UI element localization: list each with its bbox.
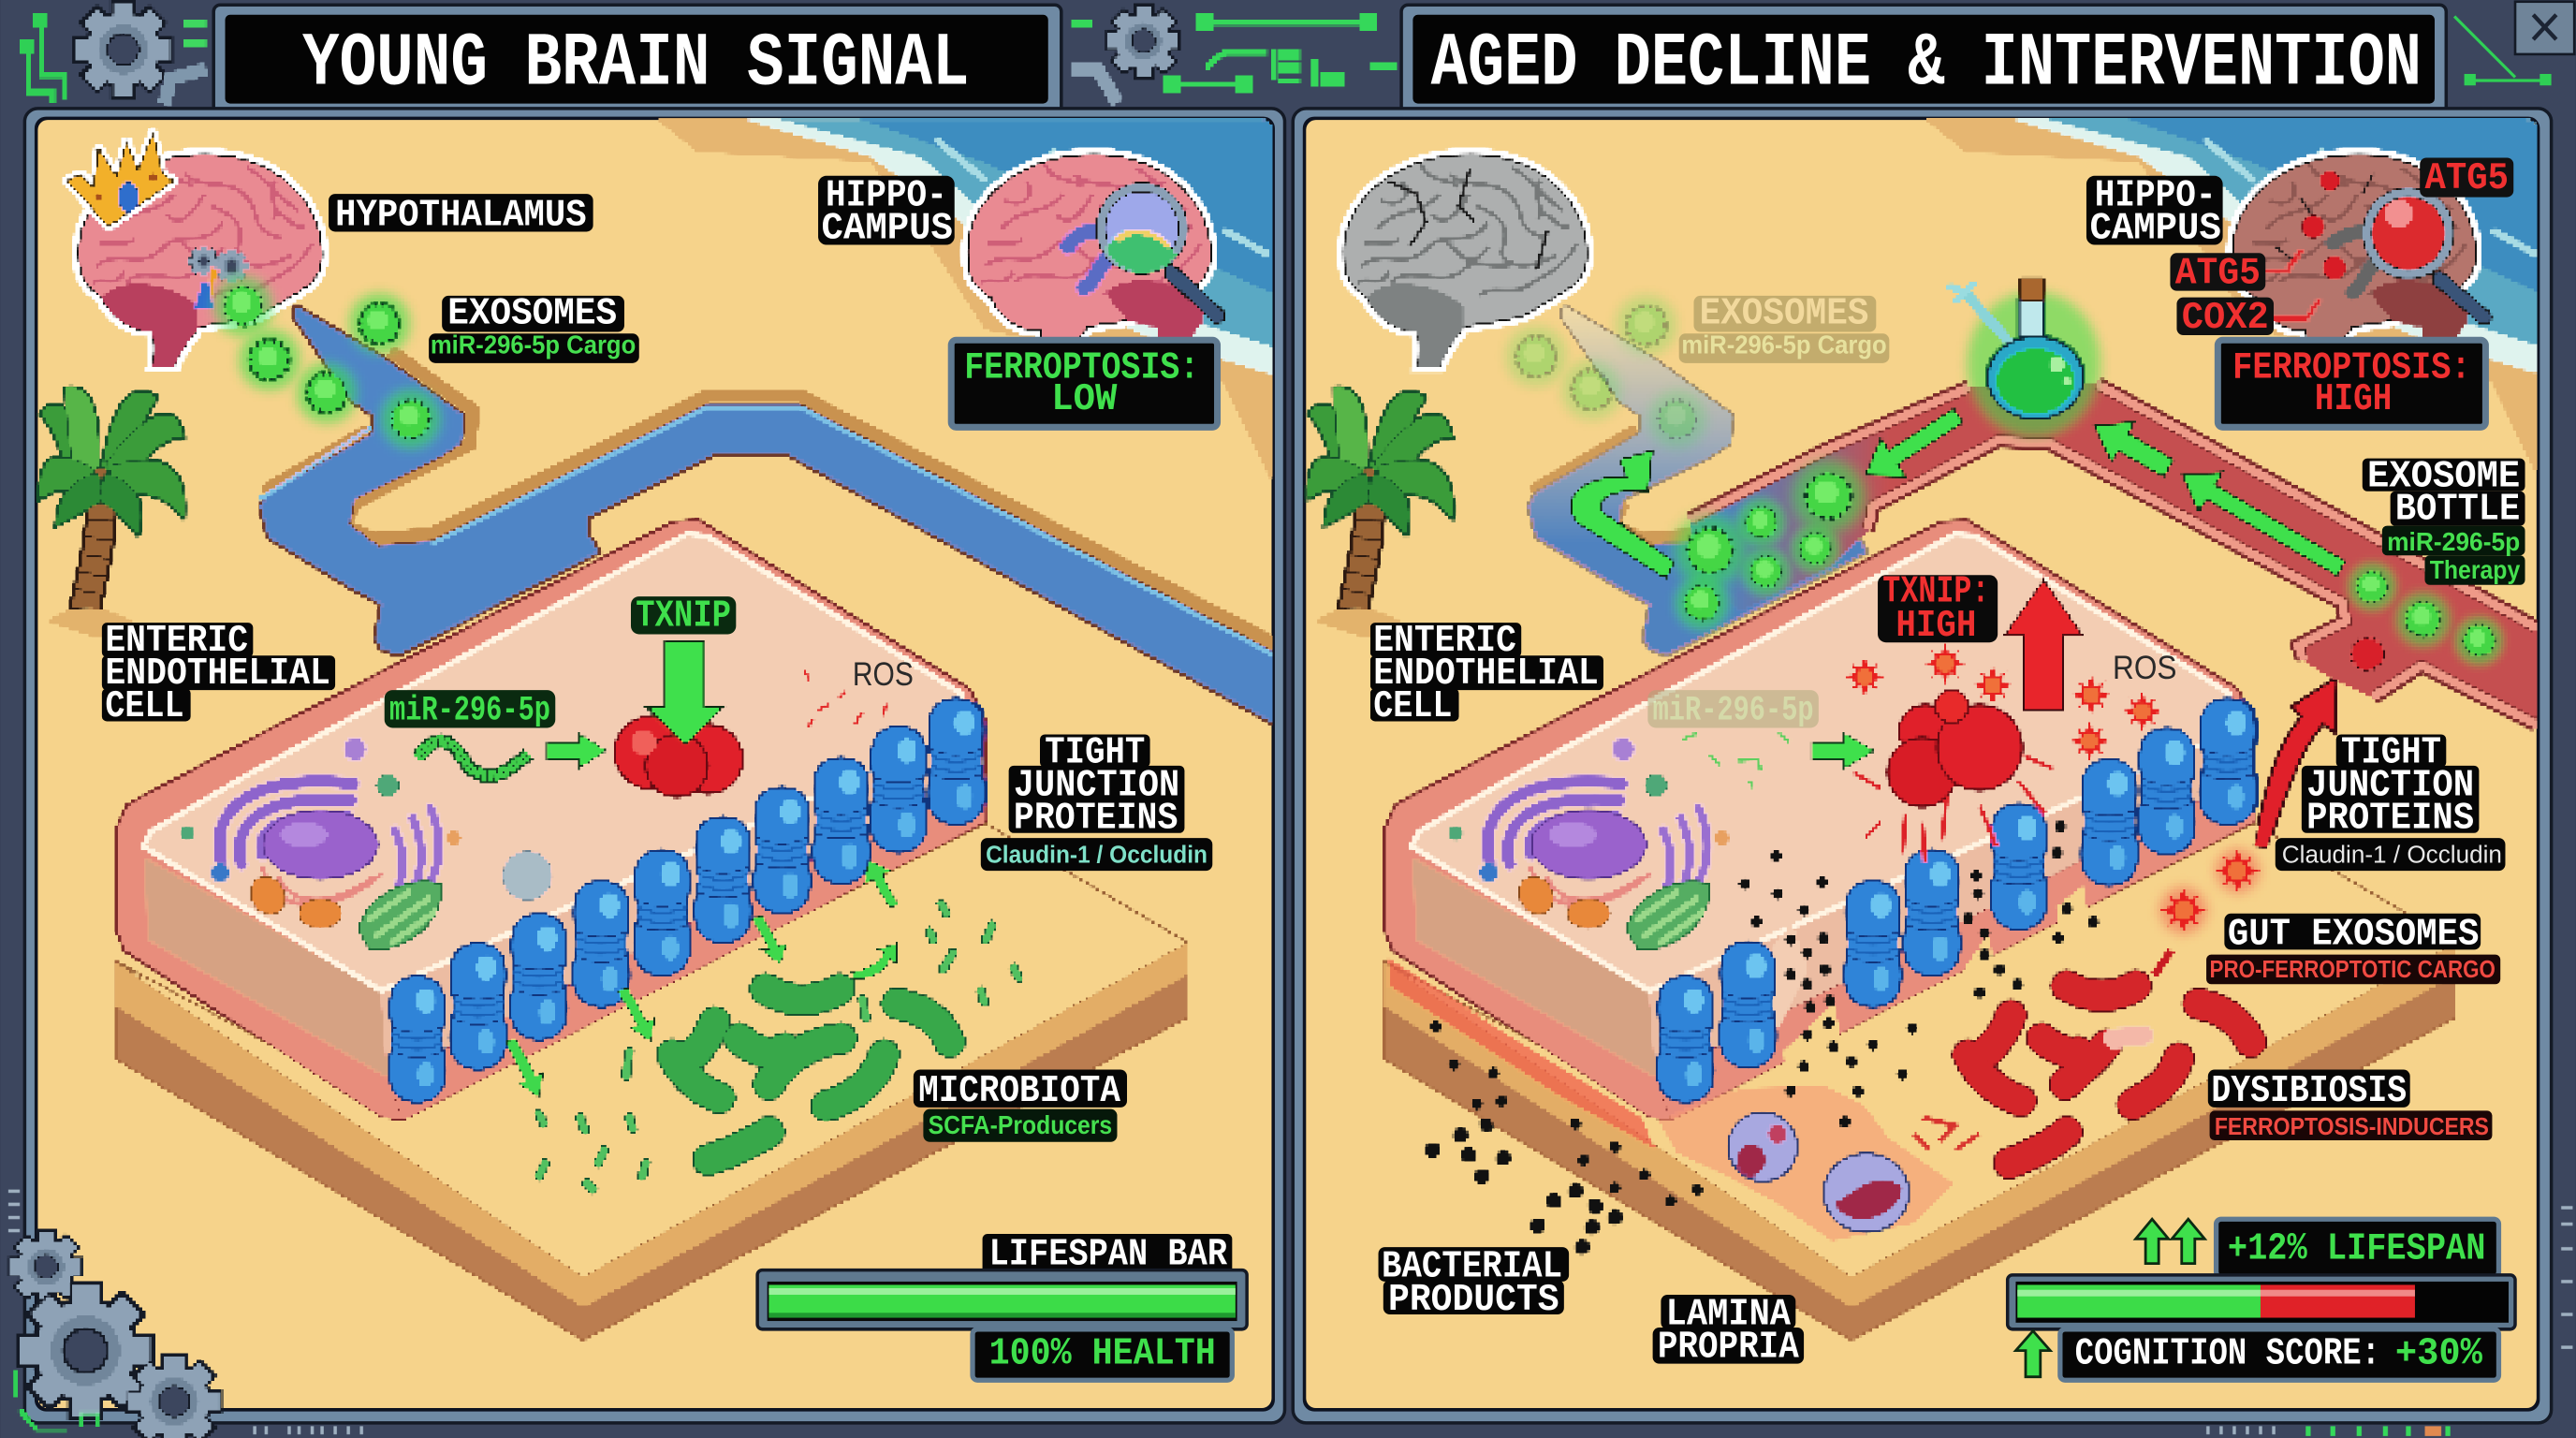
label: hypothalamus: HYPOTHALAMUS: [335, 194, 587, 237]
label: TXNIP high: HIGH: [1895, 605, 1976, 648]
label: hippocampus: HIPPO-: [2095, 174, 2217, 217]
arrow: TXNIP up: [2004, 580, 2083, 710]
label: tight junction proteins: PROTEINS: [2306, 798, 2474, 841]
label: dysbiosis: FERROPTOSIS-INDUCERS: [2215, 1112, 2489, 1140]
label: faded exosomes: miR-296-5p Cargo: [1681, 330, 1887, 359]
label: exosomes: EXOSOMES: [447, 293, 617, 336]
gut exosomes: [2154, 847, 2261, 976]
label: ROS: ROS: [2113, 650, 2176, 686]
label: ATG5: ATG5: [2175, 253, 2261, 296]
tight junction protein row: [388, 698, 985, 1103]
label: TXNIP high: [1878, 570, 1998, 648]
label: tight junction proteins: PROTEINS: [1014, 798, 1178, 841]
label: hippocampus: HIPPO-: [826, 174, 947, 217]
label: exosomes: miR-296-5p Cargo: [431, 330, 636, 359]
label: bacterial products: PRODUCTS: [1388, 1279, 1559, 1322]
label: TXNIP high: TXNIP:: [1882, 570, 1989, 613]
immune cells: [1728, 1112, 1980, 1232]
label: tight junction proteins: Claudin-1 / Occludin: [986, 840, 1208, 868]
river: [259, 305, 1275, 725]
arrow: cognition up: [2015, 1331, 2050, 1377]
label: enteric endothelial cell: [1370, 620, 1603, 728]
label: ROS: ROS: [853, 656, 914, 693]
label: enteric endothelial cell: CELL: [1373, 685, 1453, 728]
label: exosome bottle: BOTTLE: [2395, 489, 2520, 532]
label: faded exosomes: EXOSOMES: [1700, 293, 1868, 336]
icon: palm tree: [39, 388, 184, 638]
arrow: TXNIP down: [646, 642, 724, 744]
ROS sparks: [803, 670, 887, 727]
river fading to blue: [1527, 305, 1868, 657]
faded exosomes: [1506, 296, 1707, 448]
label: tight junction proteins: [2276, 731, 2505, 871]
arrows: SCFA to junction: [506, 861, 899, 1097]
cell and lamina propria: [117, 521, 1186, 1339]
miRNA strand and arrow: [417, 733, 607, 776]
callout: lifespan gain: [2217, 1219, 2498, 1277]
callout: ferroptosis high: [2217, 340, 2485, 427]
bottom and side status ticks: [8, 1191, 2572, 1436]
header decorations left: gears and circuits: [22, 4, 205, 104]
label: enteric endothelial cell: ENDOTHELIAL: [105, 653, 330, 696]
vessel with therapy path: [1690, 385, 2537, 725]
label: exosomes: [429, 293, 639, 363]
label: lamina propria: LAMINA: [1666, 1294, 1792, 1337]
title bar: aged decline and intervention: [1401, 5, 2446, 113]
title bar: young brain signal: [213, 5, 1061, 113]
label: hippocampus: [2086, 174, 2223, 250]
callout: ferroptosis low: LOW: [1051, 378, 1118, 421]
callout: ferroptosis high: FERROPTOSIS:: [2232, 347, 2471, 390]
panel: young brain: [24, 109, 1284, 1423]
lifespan bar: LIFESPAN BAR: [989, 1233, 1228, 1276]
label: tight junction proteins: JUNCTION: [1014, 764, 1179, 807]
label: gut exosomes: [2206, 913, 2500, 984]
TXNIP overexpressed blob: [1853, 690, 2054, 862]
hippocampus with ferroptosis: [2232, 154, 2484, 366]
icon: palm tree: [1308, 388, 1453, 638]
callout: cognition score: +30%: [2395, 1333, 2483, 1376]
header decorations right: close button and circuit: [2454, 2, 2574, 85]
inflammation on platform: [1388, 960, 1656, 1151]
membrane gaps: [1784, 888, 2089, 1084]
tight junction proteins with gaps: [1657, 698, 2256, 1103]
label: tight junction proteins: [981, 731, 1212, 871]
label: microbiota: [914, 1070, 1127, 1142]
label: exosome bottle: Therapy: [2430, 555, 2521, 584]
icon: exosome bottle with syringe: [1949, 279, 2100, 437]
label: lamina propria: PROPRIA: [1658, 1327, 1799, 1370]
label: dysbiosis: [2208, 1070, 2492, 1140]
lifespan bar: aged: [2008, 1275, 2515, 1329]
label: ATG5 top: ATG5: [2424, 157, 2509, 200]
miRNA fragments and arrow: [1682, 733, 1875, 788]
label: faded miR-296-5p: miR-296-5p: [1653, 692, 1814, 731]
label: hippocampus: CAMPUS: [822, 207, 953, 250]
label: tight junction proteins: TIGHT: [1045, 731, 1145, 774]
icon: hypothalamus brain with crown: [67, 133, 322, 366]
young panel artwork: [39, 118, 1275, 1339]
label: exosome bottle: miR-296-5p: [2387, 527, 2520, 556]
label: lamina propria: [1653, 1294, 1804, 1370]
label: hippocampus: [818, 174, 955, 250]
callout: ferroptosis high: HIGH: [2315, 378, 2392, 421]
label: enteric endothelial cell: CELL: [105, 685, 184, 728]
label: bacterial products: BACTERIAL: [1382, 1246, 1562, 1289]
label: gut exosomes: PRO-FERROPTOTIC CARGO: [2210, 955, 2496, 983]
callout: cognition score: COGNITION SCORE:: [2075, 1333, 2380, 1376]
label: enteric endothelial cell: ENTERIC: [105, 620, 248, 663]
microbiota: [539, 903, 1018, 1190]
therapy exosomes: [1675, 461, 2503, 670]
label: enteric endothelial cell: [102, 620, 335, 728]
label: COX2: COX2: [2182, 297, 2269, 340]
damaged cell and lamina propria: [1385, 521, 2454, 1339]
bacterial products dots: [1432, 827, 2093, 1247]
callout: cognition score: [2060, 1329, 2498, 1380]
label: tight junction proteins: TIGHT: [2341, 731, 2441, 774]
arrows: green therapy flow: [1571, 396, 2352, 588]
dysbiosis bacteria: [1969, 986, 2250, 1164]
ROS stars: [1843, 642, 2163, 762]
label: exosome bottle: EXOSOME: [2367, 455, 2520, 498]
icon: aged grey brain: [1344, 154, 1587, 366]
label: microbiota: MICROBIOTA: [918, 1070, 1121, 1113]
label: exosome bottle: [2363, 455, 2525, 585]
label: enteric endothelial cell: ENTERIC: [1373, 620, 1516, 663]
aged panel artwork: [1308, 118, 2543, 1339]
arrows: lifespan up: [2136, 1219, 2204, 1264]
TXNIP protein: [614, 716, 742, 797]
title bar: young brain signal: YOUNG BRAIN SIGNAL: [302, 22, 970, 108]
callout: lifespan gain: +12% LIFESPAN: [2228, 1227, 2485, 1270]
label: microbiota: SCFA-Producers: [929, 1110, 1112, 1139]
label: tight junction proteins: JUNCTION: [2306, 764, 2474, 807]
label: enteric endothelial cell: ENDOTHELIAL: [1373, 653, 1599, 696]
label: hippocampus: CAMPUS: [2089, 207, 2221, 250]
panel: aged decline: [1293, 109, 2552, 1423]
label: faded exosomes: [1679, 293, 1889, 363]
callout: ferroptosis low: FERROPTOSIS:: [964, 347, 1199, 390]
hippocampus brain with magnifier: [968, 154, 1218, 366]
callout: 100% health: 100% HEALTH: [989, 1333, 1216, 1376]
label: tight junction proteins: Claudin-1 / Occludin: [2282, 840, 2502, 868]
corner gears: [11, 1232, 218, 1438]
shoreline and ocean: [1925, 118, 2543, 486]
label: bacterial products: [1379, 1246, 1569, 1322]
label: miR-296-5p: miR-296-5p: [389, 692, 550, 731]
callout: ferroptosis low: [951, 340, 1218, 427]
label: TXNIP: TXNIP: [636, 595, 731, 638]
exosome trail: [213, 276, 440, 448]
header decorations middle: gear and circuit board: [1071, 7, 1397, 102]
lifespan bar: [757, 1233, 1247, 1329]
arrow: red pathway to vessel: [2254, 679, 2336, 848]
shoreline and ocean: [657, 118, 1275, 486]
label: dysbiosis: DYSIBIOSIS: [2211, 1070, 2407, 1113]
label: gut exosomes: GUT EXOSOMES: [2228, 913, 2479, 956]
